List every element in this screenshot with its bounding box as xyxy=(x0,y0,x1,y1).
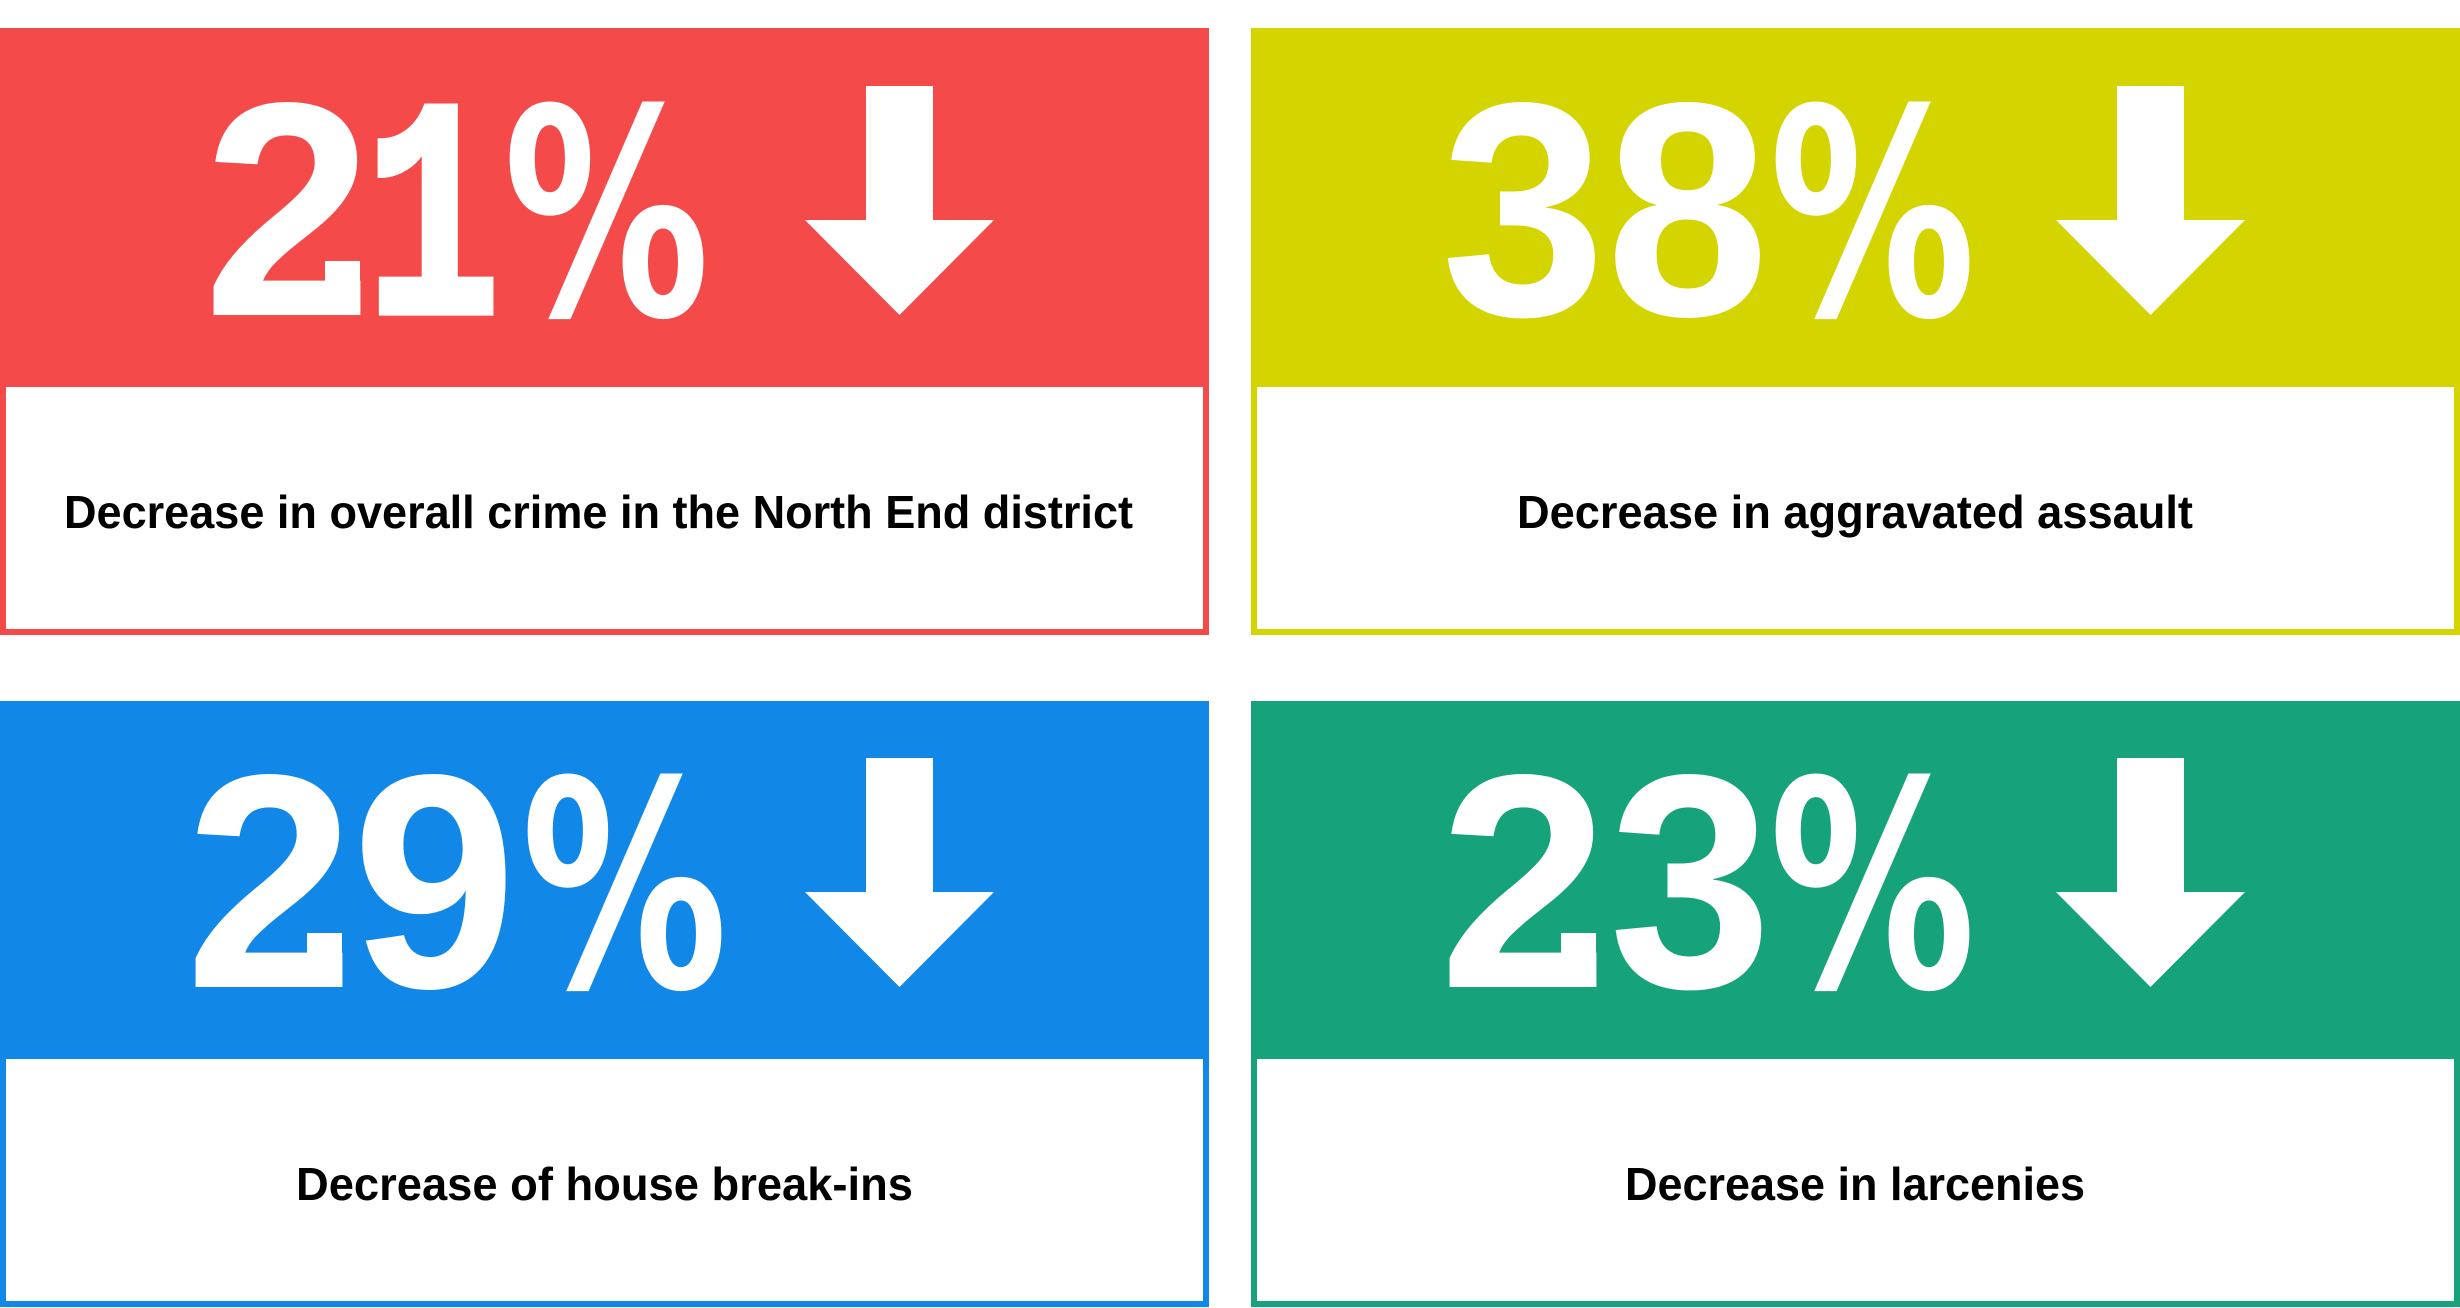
statistic: 29% xyxy=(185,711,728,1056)
statistic: 29%: 2 xyxy=(185,711,355,1052)
statistic: 21%: % xyxy=(503,50,710,384)
card frame and yellow header xyxy=(1251,28,2460,635)
statistic: 38%: 3 xyxy=(1441,39,1606,380)
statistic: 23%: % xyxy=(1769,722,1976,1056)
panel: overall crime xyxy=(0,28,1209,635)
statistic: 29%: % xyxy=(521,722,728,1056)
label: aggravated assault: Decrease in aggravated assault xyxy=(1517,486,2193,538)
statistic: 21%: 1 xyxy=(365,53,500,406)
card frame and green header xyxy=(1251,701,2460,1307)
statistic: 21% xyxy=(203,39,710,406)
statistic: 23% xyxy=(1439,711,1976,1056)
icon: down arrow xyxy=(805,758,994,987)
statistic: 29%: 9 xyxy=(352,711,517,1052)
icon: down arrow xyxy=(805,86,994,315)
label: house break-ins: Decrease of house break-ins xyxy=(296,1158,913,1210)
statistic: 21%: 2 xyxy=(203,39,373,380)
card frame and red header xyxy=(0,28,1209,635)
label: larcenies: Decrease in larcenies xyxy=(1625,1158,2085,1210)
statistic: 38%: % xyxy=(1769,50,1976,384)
statistic: 38% xyxy=(1441,39,1976,384)
label: overall crime: Decrease in overall crime in the North End district xyxy=(64,486,1133,538)
statistic: 23%: 2 xyxy=(1439,711,1609,1052)
statistic: 23%: 3 xyxy=(1609,712,1772,1052)
icon: down arrow xyxy=(2056,758,2245,987)
panel: aggravated assault xyxy=(1251,28,2460,635)
panel: house break-ins xyxy=(0,701,1209,1307)
panel: larcenies xyxy=(1251,701,2460,1307)
icon: down arrow xyxy=(2056,86,2245,315)
card frame and blue header xyxy=(0,701,1209,1307)
statistic: 38%: 8 xyxy=(1606,40,1769,380)
